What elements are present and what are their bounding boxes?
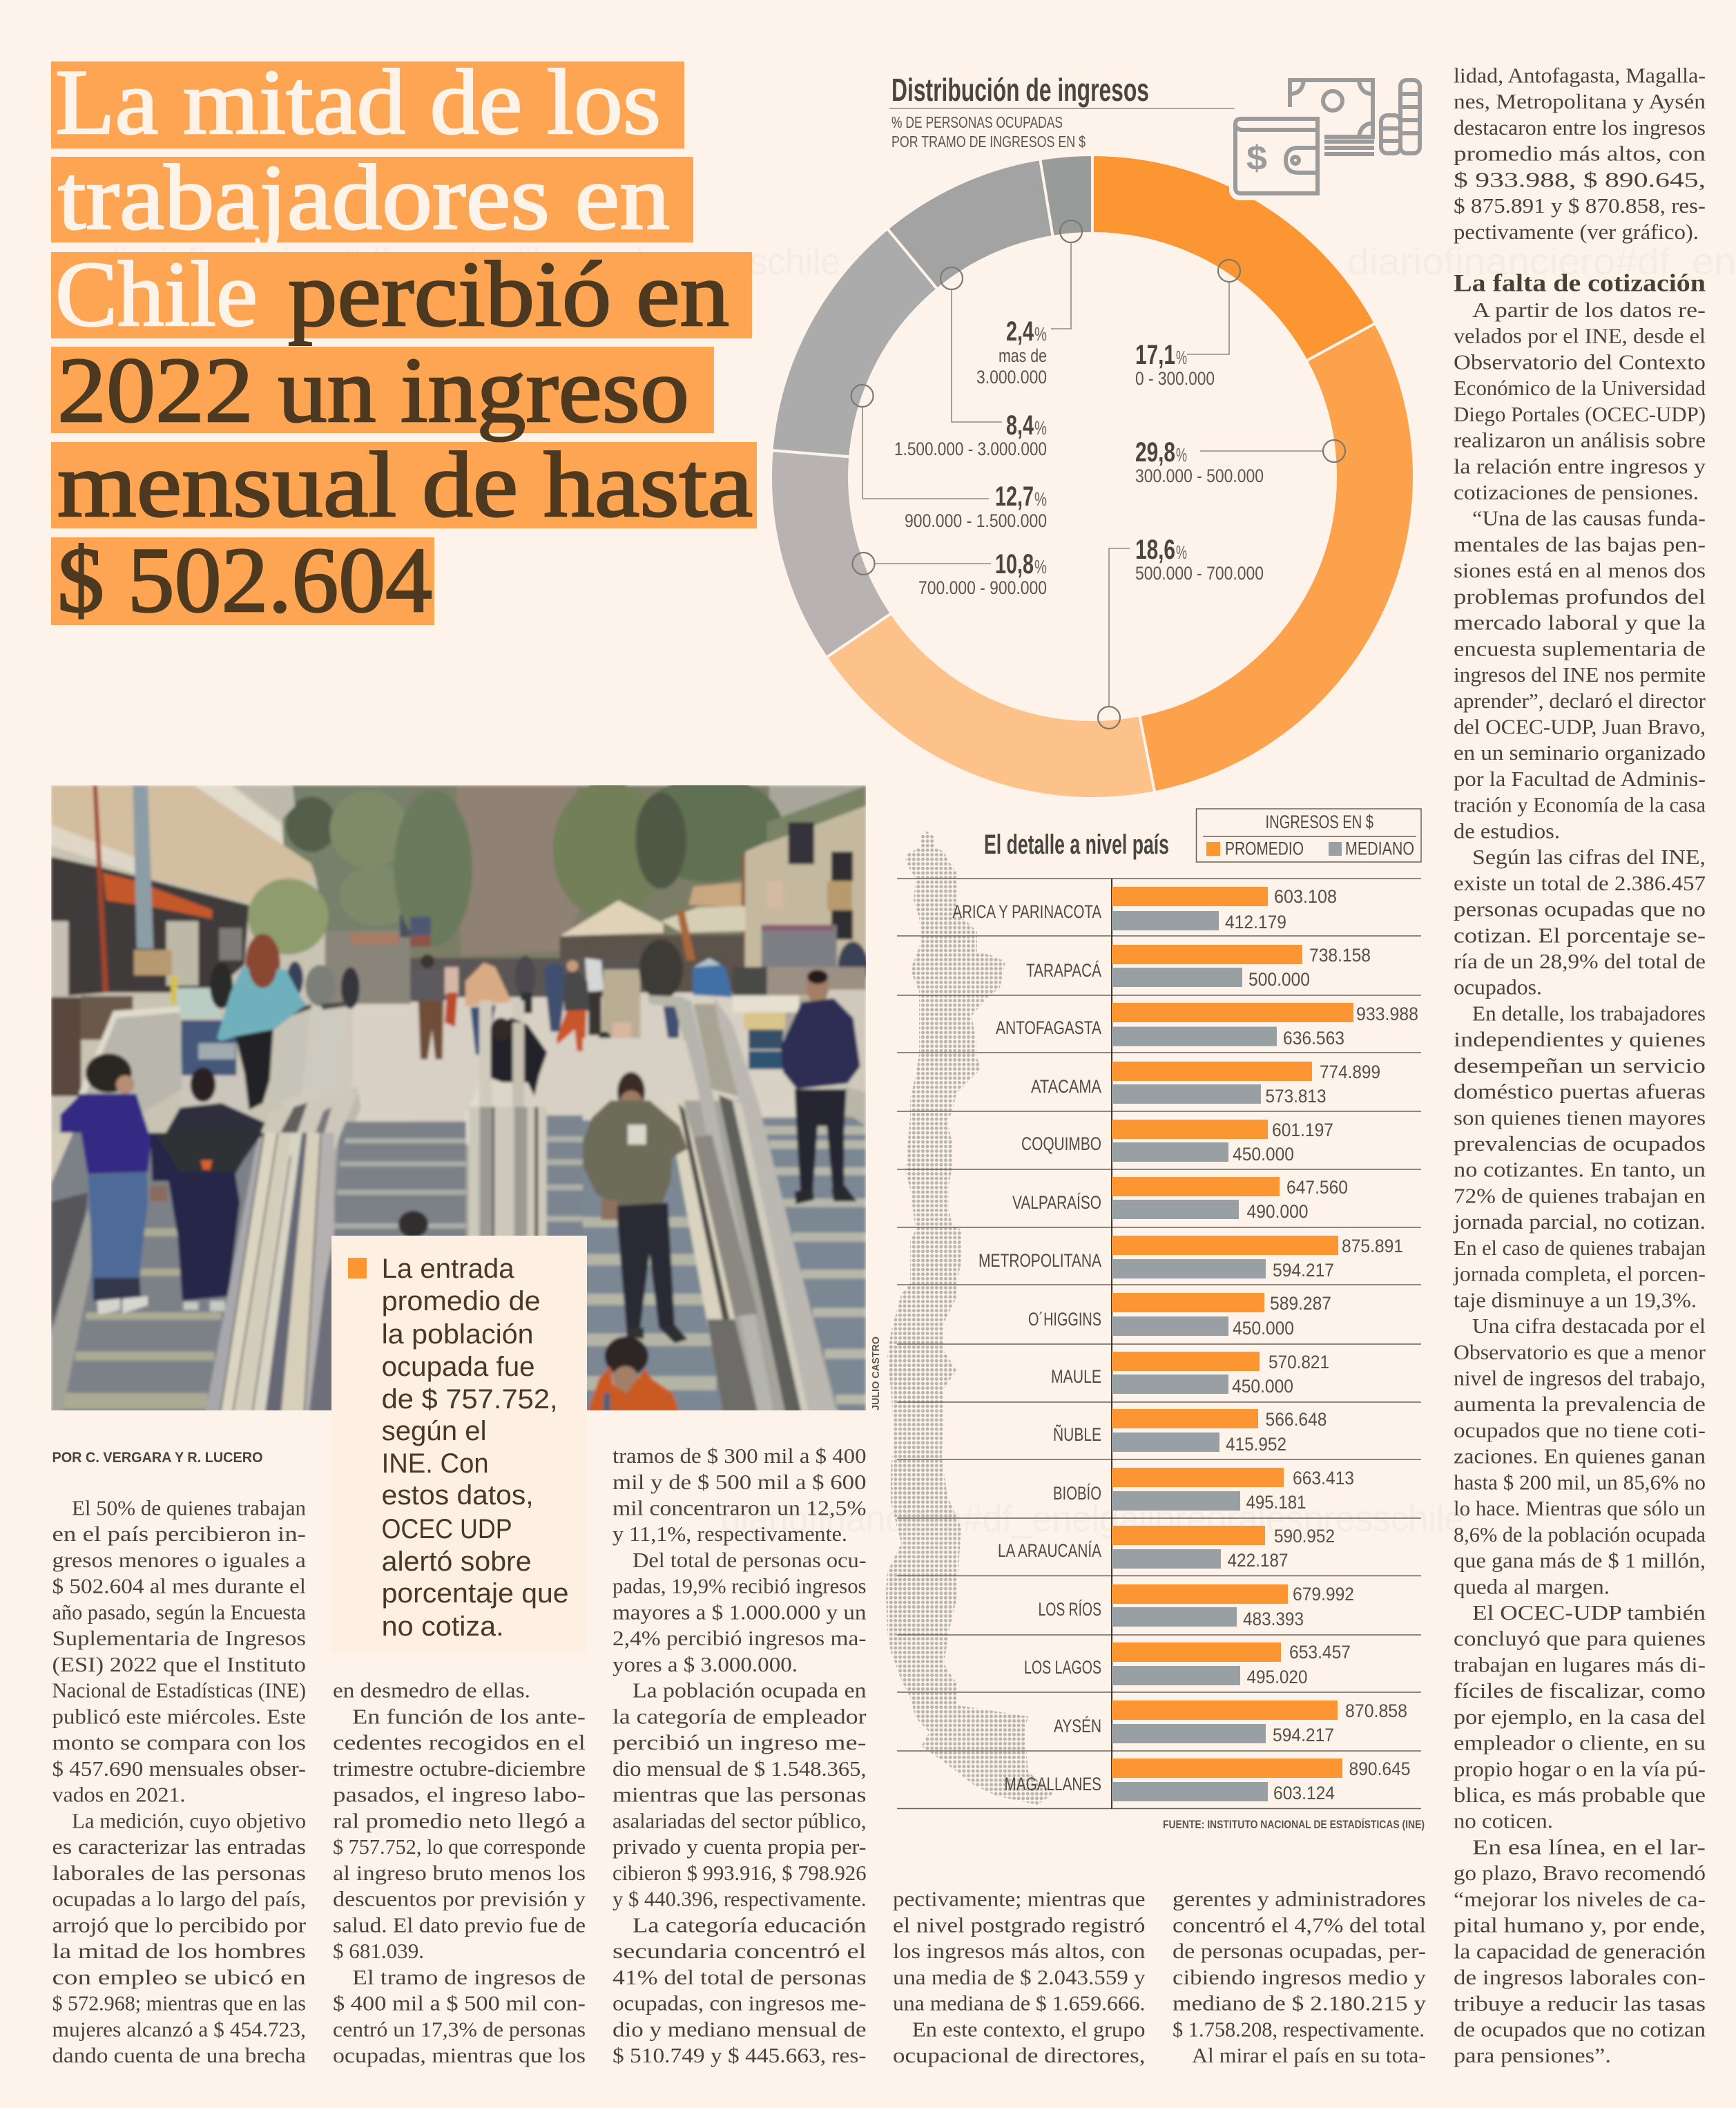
text column 3: 41% del total de personas <box>613 1965 866 1989</box>
text column 2: descuentos por previsión y <box>333 1887 586 1911</box>
donut labels and leader lines: 700.000 - 900.000 <box>918 577 1047 598</box>
donut labels and leader lines: 500.000 - 700.000 <box>1135 563 1264 584</box>
title: La mitad de los <box>55 51 661 154</box>
text column 6: desempeñan un servicio <box>1454 1053 1706 1077</box>
text column 1: arrojó que lo percibido por <box>52 1913 307 1937</box>
title: $ 502.604 <box>57 529 432 632</box>
text column 2: cedentes recogidos en el <box>333 1730 586 1754</box>
callout panel: INE. Con <box>382 1448 489 1479</box>
text column 3: mil concentraron un 12,5% <box>613 1496 866 1520</box>
text column 6: no coticen. <box>1454 1809 1553 1833</box>
text column 5: Al mirar el país en su tota- <box>1192 2043 1426 2067</box>
heading: Distribución de ingresos: POR TRAMO DE INGRESOS EN $ <box>891 133 1086 151</box>
text column 6: son quienes tienen mayores <box>1454 1105 1706 1129</box>
title: trabajadores en <box>58 146 670 249</box>
text column 6: Diego Portales (OCEC-UDP) <box>1454 402 1706 426</box>
text column 3: y 11,1%, respectivamente. <box>613 1522 847 1546</box>
donut labels and leader lines: % <box>1034 323 1047 345</box>
legend: INGRESOS EN $ <box>1265 812 1373 832</box>
row: Arica y Parinacota: 603.108 <box>1274 886 1337 907</box>
text column 6: promedio más altos, con <box>1454 142 1706 166</box>
text column 6: zaciones. En quienes ganan <box>1454 1444 1706 1468</box>
text column 6: Observatorio del Contexto <box>1454 349 1706 374</box>
text column 1: Suplementaria de Ingresos <box>52 1626 306 1650</box>
row: Ñuble: ÑUBLE <box>1053 1424 1101 1445</box>
row: Antofagasta <box>996 1003 1418 1048</box>
text column 6: en un seminario organizado <box>1454 740 1706 765</box>
text column 6: pectivamente (ver gráfico). <box>1454 220 1699 244</box>
text column 6: pital humano y, por ende, <box>1454 1913 1706 1937</box>
text column 6: A partir de los datos re- <box>1472 298 1706 322</box>
text column 1: con empleo se ubicó en <box>52 1965 307 1989</box>
text column 2: trimestre octubre-diciembre <box>333 1756 586 1781</box>
text column 6: realizaron un análisis sobre <box>1454 428 1706 452</box>
text column 1: $ 457.690 mensuales obser- <box>52 1756 306 1781</box>
photo: far-right buildings <box>745 785 868 998</box>
text column 1: publicó este miércoles. Este <box>52 1704 306 1728</box>
callout panel <box>331 1236 587 1654</box>
text column 6: $ 933.988, $ 890.645, <box>1454 167 1706 191</box>
text column 6: En el caso de quienes trabajan <box>1454 1236 1706 1260</box>
text column 2: En función de los ante- <box>352 1704 586 1728</box>
text column 6: cotizaciones de pensiones. <box>1454 480 1699 504</box>
callout panel: La entrada <box>382 1254 514 1284</box>
text column 6: trabajan en lugares más di- <box>1454 1652 1706 1676</box>
text column 6: queda al margen. <box>1454 1574 1610 1598</box>
row: Biobío <box>1053 1468 1354 1513</box>
text column 3: La categoría educación <box>633 1913 867 1937</box>
text column 6: En detalle, los trabajadores <box>1472 1001 1706 1025</box>
text column 1: año pasado, según la Encuesta <box>52 1600 306 1625</box>
chart source: FUENTE: INSTITUTO NACIONAL DE ESTADÍSTICAS (INE) <box>1163 1818 1425 1831</box>
text column 6: ocupados que no tiene coti- <box>1454 1418 1706 1442</box>
text column 6: tribuye a reducir las tasas <box>1454 1991 1706 2015</box>
donut labels and leader lines: 3.000.000 <box>976 367 1047 387</box>
text column 6: mentales de las bajas pen- <box>1454 532 1706 557</box>
text column 6: fíciles de fiscalizar, como <box>1454 1678 1706 1703</box>
text column 2: en desmedro de ellas. <box>333 1678 530 1703</box>
text column 6: $ 875.891 y $ 870.858, res- <box>1454 193 1706 218</box>
row: Aysén: 870.858 <box>1345 1700 1407 1721</box>
text column 6: la capacidad de generación <box>1454 1939 1706 1963</box>
subheading: La falta de cotización: La falta de cotización <box>1454 269 1706 296</box>
donut labels and leader lines: 17,1 <box>1135 340 1175 370</box>
row: Los Lagos: 495.020 <box>1247 1667 1308 1687</box>
text column 6: lo hace. Mientras que sólo un <box>1454 1496 1706 1520</box>
text column 3: ocupadas, con ingresos me- <box>613 1991 866 2015</box>
text column 2: El tramo de ingresos de <box>352 1965 586 1989</box>
watermark text: diariofinanciero#df_en <box>1347 241 1736 282</box>
text column 1: Nacional de Estadísticas (INE) <box>52 1678 306 1703</box>
text column 3: $ 510.749 y $ 445.663, res- <box>613 2043 866 2067</box>
text column 6: que gana más de $ 1 millón, <box>1454 1549 1706 1572</box>
row: Tarapacá: 738.158 <box>1309 945 1371 966</box>
text column 6: 8,6% de la población ocupada <box>1454 1522 1706 1546</box>
text column 1: gresos menores o iguales a <box>52 1548 306 1572</box>
bar chart: ingresos por región <box>897 879 1421 1809</box>
text column 6: por la Facultad de Adminis- <box>1454 767 1706 791</box>
byline: POR C. VERGARA Y R. LUCERO <box>52 1450 262 1466</box>
text column 6: problemas profundos del <box>1454 584 1706 609</box>
text column 6: aumenta la prevalencia de <box>1454 1392 1706 1416</box>
text column 1: El 50% de quienes trabajan <box>72 1496 306 1520</box>
title <box>51 51 757 632</box>
callout panel: la población <box>382 1319 534 1350</box>
heading: Distribución de ingresos: Distribución de ingresos <box>891 72 1149 108</box>
donut labels and leader lines: mas de <box>999 345 1047 366</box>
text column 6: concluyó que para quienes <box>1454 1627 1706 1651</box>
title: 2022 un ingreso <box>57 339 689 442</box>
donut chart <box>771 155 1414 798</box>
row: Biobío: 663.413 <box>1293 1468 1354 1488</box>
row: Los Ríos: LOS RÍOS <box>1039 1599 1101 1620</box>
text column 6: para pensiones”. <box>1454 2043 1611 2067</box>
donut labels and leader lines: % <box>1176 542 1187 563</box>
text column 6: 72% de quienes trabajan en <box>1454 1184 1706 1207</box>
text column 1: (ESI) 2022 que el Instituto <box>52 1652 306 1676</box>
text column 6: siones está en al menos dos <box>1454 558 1706 582</box>
row: Los Lagos <box>1024 1642 1351 1687</box>
text column 2 <box>333 1678 586 2067</box>
map of Chile in dots <box>886 831 1053 1805</box>
donut labels and leader lines: % <box>1034 488 1047 510</box>
text column 6: destacaron entre los ingresos <box>1454 115 1706 140</box>
text column 6: doméstico puertas afueras <box>1454 1080 1706 1104</box>
text column 5: gerentes y administradores <box>1173 1887 1426 1911</box>
text column 3 <box>613 1444 867 2067</box>
icon: wallet, bills and coins: $ <box>1246 139 1267 178</box>
row: Valparaíso <box>1012 1177 1348 1222</box>
row: Metropolitana: METROPOLITANA <box>978 1250 1101 1271</box>
text column 1: ocupadas a lo largo del país, <box>52 1887 306 1911</box>
text column 2: centró un 17,3% de personas <box>333 2017 586 2041</box>
donut labels and leader lines: 1.500.000 - 3.000.000 <box>894 439 1047 459</box>
title: mensual de hasta <box>57 434 753 537</box>
row: Tarapacá: TARAPACÁ <box>1026 960 1101 981</box>
row: Atacama: ATACAMA <box>1031 1076 1101 1097</box>
row: Biobío: BIOBÍO <box>1053 1483 1101 1504</box>
text column 4: los ingresos más altos, con <box>893 1939 1146 1963</box>
row: Arica y Parinacota <box>953 886 1337 932</box>
text column 1: monto se compara con los <box>52 1730 306 1754</box>
text column 1: $ 502.604 al mes durante el <box>52 1574 306 1598</box>
text column 4: En este contexto, el grupo <box>912 2017 1145 2041</box>
legend: MEDIANO <box>1345 839 1414 859</box>
row: Biobío: 495.181 <box>1246 1492 1306 1513</box>
row: O'Higgins: 450.000 <box>1233 1318 1294 1339</box>
text column 6 <box>1453 64 1706 2067</box>
watermark text: diariofinanciero#df_enelgalibreoralespresschile <box>721 1498 1464 1540</box>
text column 3: asalariadas del sector público, <box>613 1808 866 1832</box>
row: Aysén: 594.217 <box>1273 1725 1334 1745</box>
text column 2: ral promedio neto llegó a <box>333 1808 586 1832</box>
text column 3: padas, 19,9% recibió ingresos <box>613 1574 866 1598</box>
row: Metropolitana: 875.891 <box>1342 1236 1403 1256</box>
watermark text <box>100 241 1736 1540</box>
text column 6: empleador o cliente, en su <box>1454 1731 1706 1755</box>
text column 5: $ 1.758.208, respectivamente. <box>1173 2017 1425 2041</box>
photo credit: JULIO CASTRO <box>870 1336 882 1410</box>
text column 6: nes, Metropolitana y Aysén <box>1454 89 1706 113</box>
row: Maule: 450.000 <box>1232 1376 1293 1397</box>
text column 3: yores a $ 3.000.000. <box>613 1652 798 1676</box>
donut labels and leader lines: 29,8 <box>1135 437 1175 468</box>
text column 6: tración y Economía de la casa <box>1454 793 1706 817</box>
text column 6: personas ocupadas que no <box>1454 897 1706 921</box>
text column 1: dando cuenta de una brecha <box>52 2043 306 2067</box>
text column 3: tramos de $ 300 mil a $ 400 <box>613 1444 866 1468</box>
row: Ñuble: 566.648 <box>1265 1409 1327 1430</box>
heading: El detalle a nivel país: El detalle a nivel país <box>984 830 1169 860</box>
row: Maule <box>1051 1352 1329 1397</box>
text column 1 <box>52 1496 307 2067</box>
row: Ñuble: 415.952 <box>1226 1434 1286 1455</box>
text column 1: La medición, cuyo objetivo <box>72 1808 306 1832</box>
row: Coquimbo: COQUIMBO <box>1021 1133 1101 1154</box>
text column 1: $ 572.968; mientras que en las <box>52 1991 306 2015</box>
text column 6: aprender”, declaró el director <box>1454 689 1706 713</box>
row: Coquimbo: 450.000 <box>1233 1144 1294 1165</box>
text column 3: 2,4% percibió ingresos ma- <box>613 1626 866 1650</box>
donut labels and leader lines: 18,6 <box>1135 535 1175 565</box>
text column 6: go plazo, Bravo recomendó <box>1454 1861 1706 1885</box>
photo: people on escalators on a pedestrian street <box>51 776 868 1412</box>
row: Los Ríos <box>1039 1584 1354 1629</box>
title: percibió en <box>288 243 729 346</box>
callout panel: estos datos, <box>382 1480 534 1511</box>
text column 5: mediano de $ 2.180.215 y <box>1173 1991 1427 2015</box>
callout panel: porcentaje que <box>382 1578 569 1609</box>
legend: PROMEDIO <box>1225 839 1304 859</box>
text column 4: el nivel postgrado registró <box>893 1913 1145 1937</box>
text column 3: secundaria concentró el <box>613 1939 866 1963</box>
row: O'Higgins: 589.287 <box>1270 1293 1331 1314</box>
text column 6: mercado laboral y que la <box>1454 611 1706 635</box>
row: Magallanes: 603.124 <box>1273 1783 1335 1803</box>
text column 2: $ 400 mil a $ 500 mil con- <box>333 1991 586 2015</box>
photo: upper-left scene with building, shops and teal-jacket woman <box>51 785 417 1144</box>
text column 6: existe un total de 2.386.457 <box>1454 871 1706 895</box>
text column 6: “mejorar los niveles de ca- <box>1454 1887 1706 1911</box>
text column 6: de estudios. <box>1454 818 1560 843</box>
photo: centre escalator steps and divider <box>205 1090 590 1410</box>
donut labels and leader lines <box>851 220 1345 729</box>
callout panel: no cotiza. <box>382 1611 504 1642</box>
row: Maule: 570.821 <box>1269 1352 1329 1372</box>
text column 1: en el país percibieron in- <box>52 1522 306 1546</box>
text column 6: jornada completa, el porcen- <box>1453 1262 1706 1286</box>
text column 3: mayores a $ 1.000.000 y un <box>613 1600 867 1625</box>
text column 1: mujeres alcanzó a $ 454.723, <box>52 2017 306 2041</box>
text column 6: ría de un 28,9% del total de <box>1454 949 1706 973</box>
text column 3: mientras que las personas <box>613 1783 866 1807</box>
row: Valparaíso: VALPARAÍSO <box>1012 1192 1101 1213</box>
row: Atacama: 774.899 <box>1320 1062 1380 1082</box>
row: La Araucanía: 590.952 <box>1274 1526 1335 1546</box>
callout panel: ocupada fue <box>382 1352 535 1382</box>
photo: upper-centre scene with trees, canopy and crowd <box>394 776 783 1144</box>
text column 4 <box>893 1887 1146 2067</box>
row: Magallanes: 890.645 <box>1349 1759 1410 1779</box>
text column 3: y $ 440.396, respectivamente. <box>613 1887 866 1911</box>
row: Coquimbo: 601.197 <box>1272 1120 1333 1140</box>
text column 6: del OCEC-UDP, Juan Bravo, <box>1454 714 1706 739</box>
text column 6: prevalencias de ocupados <box>1454 1131 1706 1156</box>
text column 3: privado y cuenta propia per- <box>613 1834 866 1859</box>
donut labels and leader lines: 900.000 - 1.500.000 <box>905 510 1047 531</box>
text column 2: $ 681.039. <box>333 1939 424 1963</box>
text column 5: cibiendo ingresos medio y <box>1173 1965 1427 1989</box>
text column 1: la mitad de los hombres <box>52 1939 306 1963</box>
donut labels and leader lines: % <box>1176 444 1187 466</box>
row: Coquimbo <box>1021 1120 1333 1165</box>
callout panel: según el <box>382 1416 487 1446</box>
row: La Araucanía <box>998 1526 1335 1571</box>
row: Atacama: 573.813 <box>1265 1086 1326 1106</box>
donut labels and leader lines: 300.000 - 500.000 <box>1135 466 1264 486</box>
row: O'Higgins <box>1028 1293 1331 1339</box>
row: Antofagasta: 933.988 <box>1356 1004 1418 1024</box>
text column 2: pasados, el ingreso labo- <box>333 1783 586 1807</box>
row: Valparaíso: 490.000 <box>1247 1201 1308 1222</box>
callout panel: promedio de <box>382 1286 541 1316</box>
text column 4: ocupacional de directores, <box>893 2043 1145 2067</box>
text column 1: laborales de las personas <box>52 1861 306 1885</box>
donut labels and leader lines: % <box>1034 417 1047 439</box>
title: Chile <box>55 243 258 346</box>
text column 3: dio mensual de $ 1.548.365, <box>613 1756 866 1781</box>
text column 1: es caracterizar las entradas <box>52 1834 306 1859</box>
text column 2: $ 757.752, lo que corresponde <box>333 1834 586 1859</box>
text column 1: vados en 2021. <box>52 1783 185 1807</box>
row: Magallanes <box>1004 1759 1410 1803</box>
row: Tarapacá: 500.000 <box>1248 969 1310 990</box>
text column 6: propio hogar o en la vía pú- <box>1454 1756 1706 1781</box>
text column 6: El OCEC-UDP también <box>1472 1600 1706 1625</box>
text column 6: Observatorio es que a menor <box>1454 1340 1706 1364</box>
row: Los Lagos: 653.457 <box>1289 1642 1351 1663</box>
watermark text: diariofinanciero#df_enelgalibreoralespresschile.d <box>100 241 870 282</box>
text column 6: nivel de ingresos del trabajo, <box>1454 1366 1706 1390</box>
text column 6: jornada parcial, no cotizan. <box>1453 1209 1706 1234</box>
row: Aysén <box>1054 1700 1407 1745</box>
text column 6: la relación entre ingresos y <box>1454 454 1706 478</box>
text column 3: La población ocupada en <box>633 1678 867 1703</box>
callout panel: alertó sobre <box>382 1546 532 1577</box>
photo: lower-left escalator with two standing people <box>51 1133 334 1412</box>
photo: right escalators with two men and boy in orange jacket <box>583 967 866 1412</box>
text column 2: salud. El dato previo fue de <box>333 1913 586 1937</box>
text column 2: al ingreso bruto menos los <box>333 1861 586 1885</box>
row: Los Ríos: 483.393 <box>1243 1609 1304 1629</box>
text column 5: de personas ocupadas, per- <box>1173 1939 1426 1963</box>
text column 6: velados por el INE, desde el <box>1454 324 1706 348</box>
donut labels and leader lines: % <box>1034 556 1047 577</box>
heading: Distribución de ingresos <box>889 72 1235 151</box>
text column 4: una media de $ 2.043.559 y <box>893 1965 1146 1989</box>
text column 6: independientes y quienes <box>1454 1027 1706 1051</box>
callout panel: OCEC UDP <box>382 1514 512 1544</box>
row: La Araucanía: LA ARAUCANÍA <box>998 1540 1101 1561</box>
text column 6: lidad, Antofagasta, Magalla- <box>1454 64 1706 87</box>
row: Los Ríos: 679.992 <box>1293 1584 1354 1604</box>
row: Aysén: AYSÉN <box>1054 1716 1101 1736</box>
text column 3: dio y mediano mensual de <box>613 2017 866 2041</box>
text column 6: Una cifra destacada por el <box>1472 1314 1706 1338</box>
text column 3: Del total de personas ocu- <box>633 1548 866 1572</box>
row: Magallanes: MAGALLANES <box>1004 1774 1101 1794</box>
text column 6: taje disminuye a un 19,3%. <box>1454 1287 1697 1312</box>
donut labels and leader lines: % <box>1176 347 1187 368</box>
text column 5 <box>1173 1887 1427 2067</box>
row: Valparaíso: 647.560 <box>1286 1177 1348 1198</box>
text column 5: concentró el 4,7% del total <box>1173 1913 1426 1937</box>
text column 4: pectivamente; mientras que <box>893 1887 1145 1911</box>
text column 6: Económico de la Universidad <box>1454 376 1706 400</box>
legend <box>1196 809 1421 862</box>
heading: Distribución de ingresos: % DE PERSONAS OCUPADAS <box>891 113 1063 131</box>
donut labels and leader lines: 0 - 300.000 <box>1135 368 1215 389</box>
text column 6: “Una de las causas funda- <box>1472 506 1706 530</box>
text column 6: ocupados. <box>1454 975 1542 999</box>
text column 3: mil y de $ 500 mil a $ 600 <box>613 1470 866 1494</box>
row: Arica y Parinacota: ARICA Y PARINACOTA <box>953 901 1101 922</box>
text column 4: una mediana de $ 1.659.666. <box>893 1991 1145 2015</box>
text column 2: ocupadas, mientras que los <box>333 2043 586 2067</box>
text column 6: no cotizantes. En tanto, un <box>1454 1158 1706 1182</box>
text column 6: de ingresos laborales con- <box>1454 1965 1706 1989</box>
icon: wallet, bills and coins <box>1234 80 1420 195</box>
callout panel: de $ 757.752, <box>382 1384 558 1415</box>
donut labels and leader lines: 10,8 <box>995 549 1034 579</box>
text column 3: la categoría de empleador <box>613 1704 867 1728</box>
row: Atacama <box>1031 1062 1380 1106</box>
donut labels and leader lines: 2,4 <box>1006 316 1034 347</box>
row: O'Higgins: O´HIGGINS <box>1028 1309 1101 1330</box>
text column 6: de ocupados que no cotizan <box>1454 2017 1706 2042</box>
text column 6: ingresos del INE nos permite <box>1454 662 1706 687</box>
row: Ñuble <box>1053 1409 1327 1455</box>
row: Antofagasta: ANTOFAGASTA <box>996 1017 1101 1038</box>
row: Metropolitana <box>978 1236 1403 1281</box>
text column 3: cibieron $ 993.916, $ 798.926 <box>613 1861 866 1885</box>
row: Tarapacá <box>1026 945 1371 990</box>
text column 3: percibió un ingreso me- <box>613 1730 866 1754</box>
row: Antofagasta: 636.563 <box>1283 1028 1344 1048</box>
text column 6: hasta $ 200 mil, un 85,6% no <box>1454 1470 1706 1494</box>
donut labels and leader lines: 8,4 <box>1006 410 1034 441</box>
text column 6: por ejemplo, en la casa del <box>1454 1705 1706 1729</box>
text column 6: blica, es más probable que <box>1454 1783 1706 1807</box>
row: Los Lagos: LOS LAGOS <box>1024 1657 1101 1678</box>
row: Maule: MAULE <box>1051 1366 1101 1387</box>
text column 6: En esa línea, en el lar- <box>1472 1834 1706 1859</box>
text column 6: Según las cifras del INE, <box>1472 845 1706 869</box>
text column 6: encuesta suplementaria de <box>1454 636 1706 660</box>
row: La Araucanía: 422.187 <box>1228 1550 1289 1571</box>
donut labels and leader lines: 12,7 <box>995 481 1034 512</box>
row: Metropolitana: 594.217 <box>1273 1260 1334 1281</box>
text column 6: cotizan. El porcentaje se- <box>1454 923 1706 947</box>
row: Arica y Parinacota: 412.179 <box>1225 912 1286 932</box>
